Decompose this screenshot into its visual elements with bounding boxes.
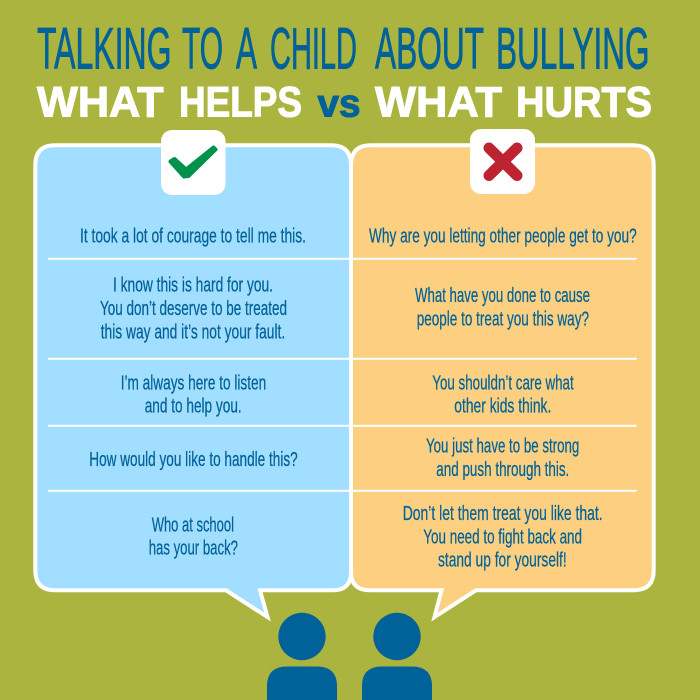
text: hurts statement 3: other kids think. [454,395,551,418]
title [37,16,650,82]
text: hurts statement 2 [415,284,590,331]
panel: what helps [35,130,352,617]
icon: check mark [161,130,226,195]
text: hurts statement 3 [432,371,574,418]
subtitle: WHAT [37,79,164,127]
subtitle: vs [318,83,360,126]
text: helps statement 2: I know this is hard for you. [113,274,273,297]
speech bubble: helps [35,145,351,617]
speech bubble: hurts [351,145,654,617]
icon: person left [267,613,337,700]
text: hurts statement 5: You need to fight back and [423,525,582,548]
title: CHILD [270,16,357,82]
text: hurts statement 5 [403,502,603,572]
text: hurts statement 4: You just have to be strong [426,435,579,458]
text: hurts statement 5: Don’t let them treat you like that. [403,502,603,525]
subtitle: HURTS [516,79,652,127]
subtitle [37,79,652,127]
dividers: hurts [353,258,637,492]
text: helps statement 5 [149,513,238,560]
dividers: helps [48,258,352,492]
text: helps statement 1: It took a lot of courage to tell me this. [80,225,306,248]
text: hurts statement 3: You shouldn’t care what [432,371,574,394]
title: TALKING [37,16,172,82]
text: hurts statement 4: and push through this. [436,458,569,481]
text: hurts statement 4 [426,435,579,481]
text: helps statement 3: I’m always here to listen [121,371,266,394]
title: A [236,16,257,82]
text: helps statement 2 [100,274,287,343]
text: helps statement 5: has your back? [149,537,238,560]
panel: what hurts [351,129,654,617]
icon: person right [362,613,432,700]
text: helps statement 5: Who at school [152,513,234,536]
text: helps statement 3 [121,371,266,418]
subtitle: HELPS [179,79,302,127]
icon: x mark [470,129,535,194]
text: helps statement 2: this way and it’s not your fault. [101,320,285,343]
text: hurts statement 2: What have you done to cause [415,284,590,307]
text: helps statement 4: How would you like to handle this? [89,448,298,471]
title: TO [182,16,223,82]
title: ABOUT [375,16,484,82]
text: hurts statement 2: people to treat you this way? [417,308,589,331]
text: hurts statement 5: stand up for yourself! [438,549,567,572]
subtitle: WHAT [375,79,502,127]
text: helps statement 2: You don’t deserve to be treated [100,297,287,320]
text: helps statement 3: and to help you. [145,395,242,418]
